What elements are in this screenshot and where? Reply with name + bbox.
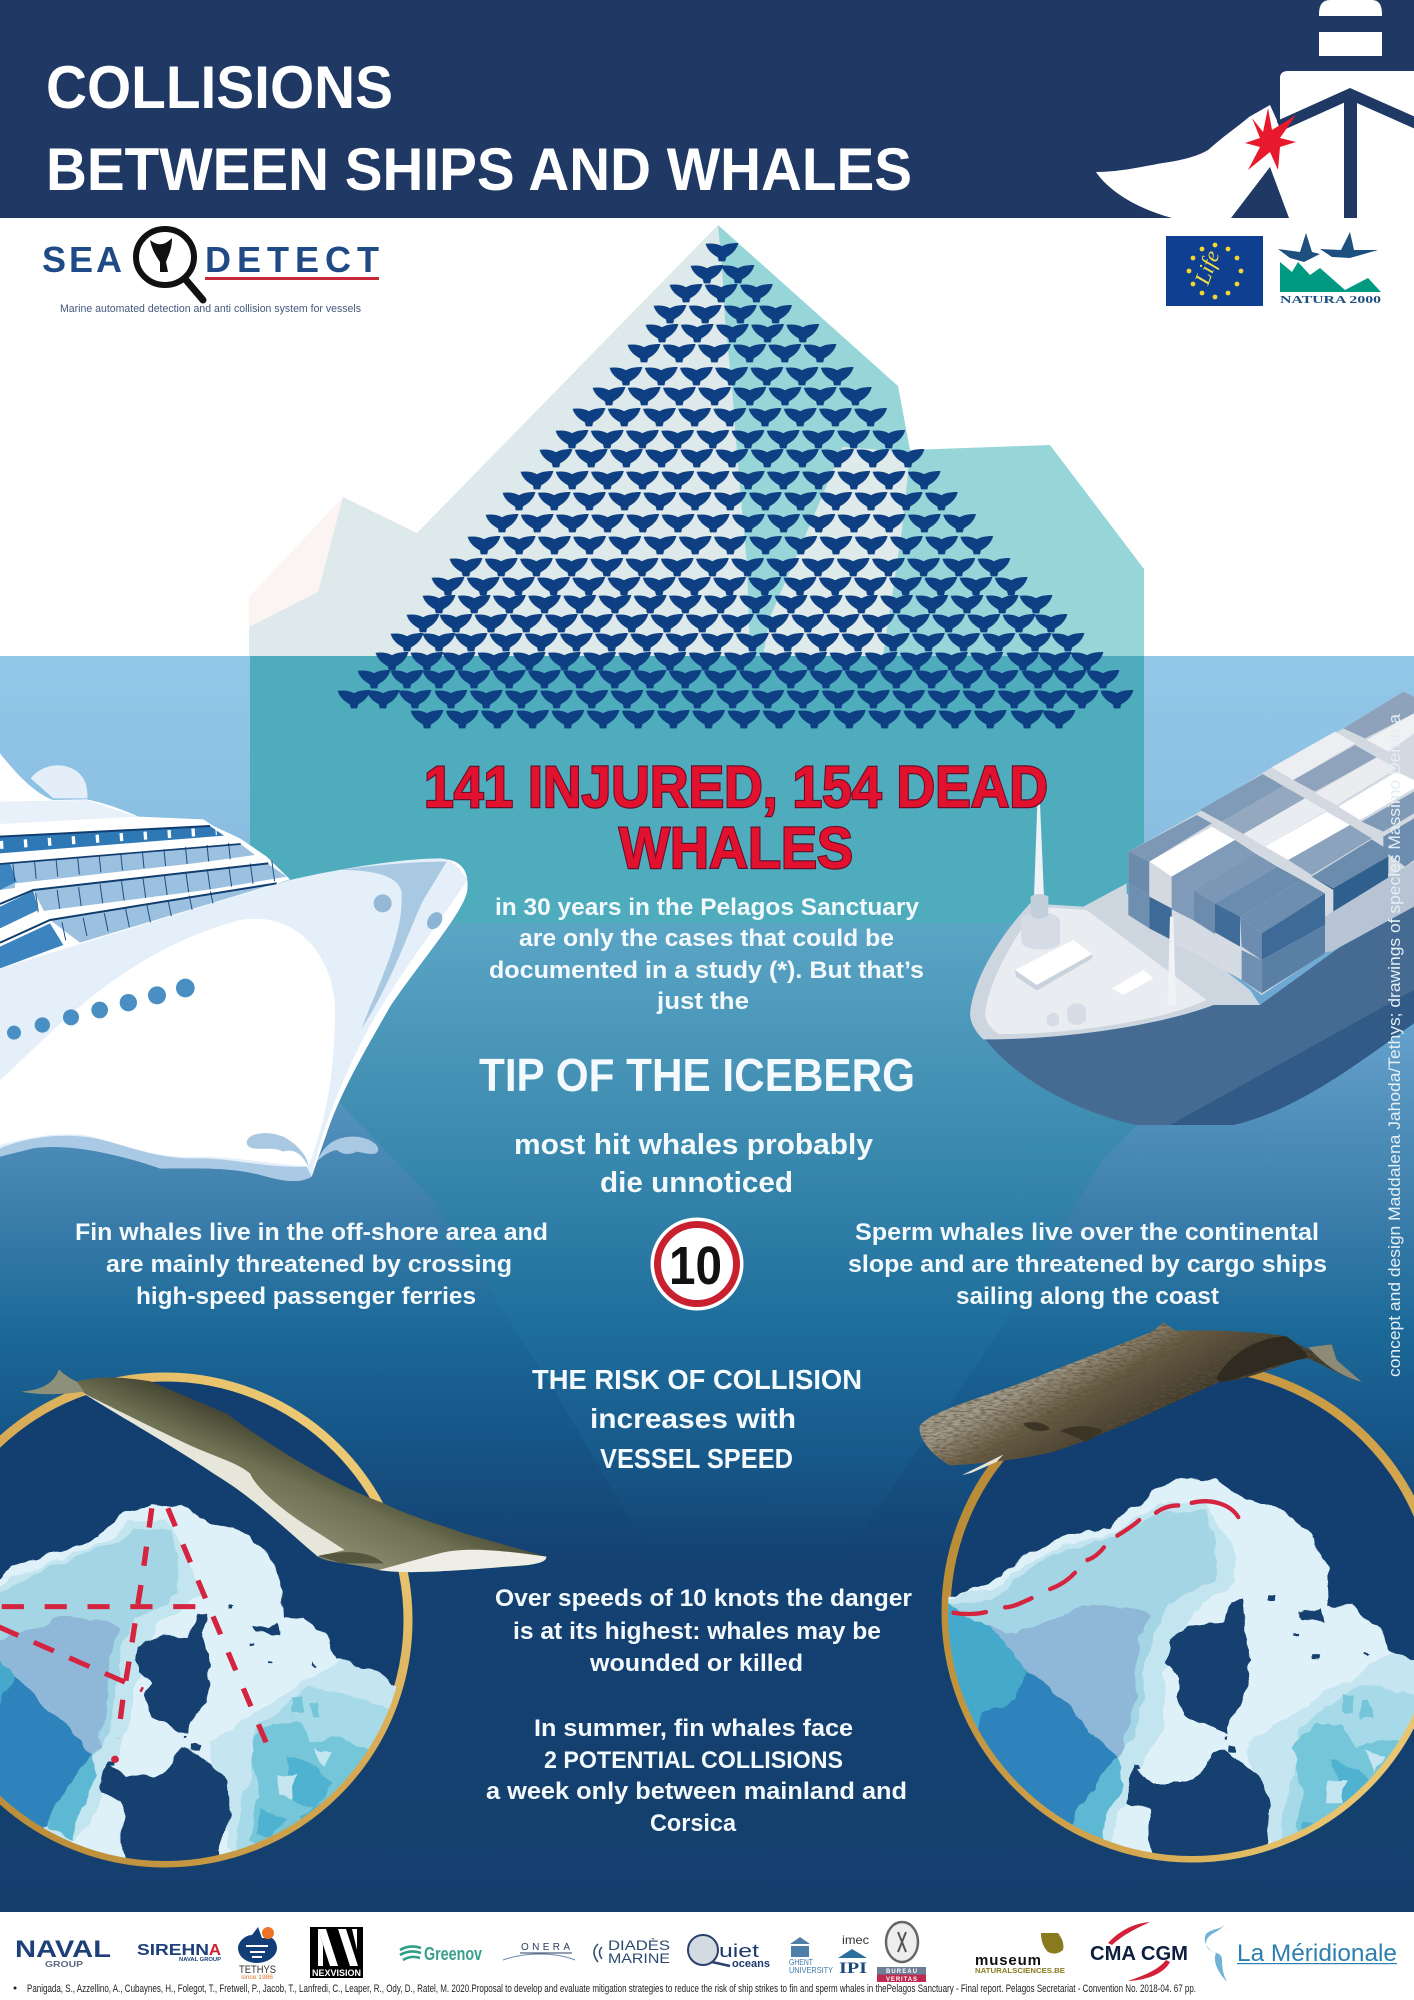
header band	[0, 0, 1414, 218]
text: sperm whales: sailing along the coast	[956, 1283, 1219, 1310]
logo: La Meridionale: La Méridionale	[1237, 1940, 1397, 1967]
text: documented cases	[489, 894, 924, 1015]
text: over 10 knots: wounded or killed	[589, 1650, 803, 1677]
title: BETWEEN SHIPS AND WHALES	[46, 136, 912, 203]
text: potential collisions: 2 POTENTIAL COLLISIONS	[544, 1747, 843, 1774]
logo: Sirehna: NAVAL GROUP	[179, 1957, 222, 1963]
logo: La Meridionale	[1205, 1923, 1397, 1982]
logo: Tethys: since 1986	[241, 1974, 273, 1981]
text: over 10 knots	[495, 1585, 912, 1677]
logo: Ghent University	[789, 1937, 833, 1975]
hull white highlight	[0, 919, 335, 1167]
logo: SEA DETECT: SEA	[42, 239, 122, 280]
logo: Greenov: Greenov	[424, 1944, 482, 1964]
text: fin whales	[75, 1219, 548, 1310]
sperm whale tail fluke	[1308, 1344, 1362, 1382]
logo: Naval Group: GROUP	[45, 1959, 83, 1969]
heading: tip of the iceberg: TIP OF THE ICEBERG	[479, 1049, 915, 1101]
icon: 10 knots speed limit sign	[650, 1218, 744, 1310]
sperm whale illustration	[920, 1323, 1362, 1475]
text: risk of collision: increases with	[590, 1403, 796, 1434]
left circle: fin whale shipping routes map	[0, 1372, 412, 1868]
logo: Sirehna: SIREHN	[137, 1942, 209, 1959]
cargo platform backing	[1128, 692, 1414, 995]
hull	[0, 858, 467, 1181]
bow white stripe	[312, 859, 468, 1177]
title	[46, 54, 912, 203]
text: risk of collision: THE RISK OF COLLISION	[532, 1364, 862, 1395]
headline: casualties: WHALES	[619, 816, 853, 881]
logo: Nexvision	[310, 1927, 363, 1978]
logo: CMA CGM	[1090, 1922, 1188, 1981]
text: documented cases: in 30 years in the Pelagos Sanctuary	[495, 894, 920, 921]
logo: EU Life	[1166, 236, 1263, 306]
deck fittings	[1015, 940, 1092, 985]
logo: Diades Marine: DIADÈS	[608, 1937, 670, 1953]
right circle: sperm whale shipping route map	[942, 1372, 1414, 1862]
logo: Sirehna: A	[209, 1942, 221, 1959]
iceberg waterline block	[250, 656, 1144, 923]
text: potential collisions: In summer, fin whales face	[534, 1715, 853, 1742]
headline: casualties: 141 INJURED, 154 DEAD	[424, 755, 1048, 820]
fin whale flipper	[318, 1552, 384, 1563]
logo: Naval Group	[15, 1936, 111, 1969]
ship funnel dome	[31, 765, 87, 798]
logo: SEA DETECT: DETECT	[205, 239, 379, 280]
text: documented cases: documented in a study (*). But that’s	[489, 957, 924, 984]
text: sperm whales	[848, 1219, 1327, 1310]
bow facet	[340, 862, 447, 1028]
headline: casualties	[424, 755, 1048, 881]
credits vertical text: concept and design Maddalena Jahoda/Tethys; drawings of species Massimo Demma	[1385, 713, 1404, 1377]
text: risk of collision	[532, 1364, 862, 1474]
containers	[1128, 815, 1212, 862]
text: fin whales: Fin whales live in the off-shore area and	[75, 1219, 548, 1246]
text: die unnoticed: die unnoticed	[600, 1167, 793, 1199]
logo: Museum of Natural Sciences	[975, 1933, 1065, 1975]
text: potential collisions: Corsica	[650, 1810, 737, 1837]
logo: Natura 2000: NATURA 2000	[1280, 294, 1382, 306]
logo: Diades Marine: MARINE	[608, 1950, 670, 1966]
logo: CMA CGM: CMA CGM	[1090, 1943, 1188, 1965]
iceberg above water	[249, 225, 1144, 923]
logo: imec IPI: imec	[842, 1933, 869, 1947]
cruise ship	[0, 753, 468, 1181]
icon: 10 knots speed limit sign: 10	[669, 1236, 722, 1296]
text: documented cases: are only the cases that could be	[519, 925, 894, 952]
logo: Museum of Natural Sciences: NATURALSCIENCES.BE	[975, 1966, 1065, 1975]
logo: Ghent University: GHENT	[789, 1957, 813, 1967]
portholes	[374, 894, 392, 912]
fin whale belly	[82, 1393, 345, 1557]
icon: ship prow striking a whale	[1096, 0, 1414, 218]
text: documented cases: just the	[656, 988, 749, 1015]
map: ferry routes	[0, 1504, 396, 1861]
logo: Ghent University: UNIVERSITY	[789, 1965, 833, 1975]
text: potential collisions	[486, 1715, 907, 1837]
fin whale fluke	[21, 1369, 84, 1394]
logo: ONERA: ONERA	[521, 1942, 570, 1953]
text: over 10 knots: Over speeds of 10 knots the danger	[495, 1585, 912, 1612]
bow waves	[247, 1133, 308, 1167]
container ship	[970, 692, 1414, 1125]
logo: Sirehna	[137, 1942, 222, 1963]
hull waterline shade	[0, 1136, 312, 1181]
logo: Museum of Natural Sciences: museum	[975, 1952, 1041, 1969]
text: die unnoticed: most hit whales probably	[514, 1129, 873, 1161]
logo: imec IPI: IPI	[839, 1960, 867, 1977]
fin whale jaw	[379, 1550, 546, 1572]
whale tails grid: one tail per documented case	[336, 243, 1135, 730]
text: over 10 knots: is at its highest: whales may be	[513, 1618, 881, 1645]
logo: EU Life: Life	[1189, 247, 1224, 289]
fin whale illustration	[21, 1369, 546, 1572]
text: sperm whales: Sperm whales live over the continental	[855, 1219, 1319, 1246]
logo: Bureau Veritas: BUREAU	[886, 1969, 917, 1975]
text: potential collisions: a week only between mainland and	[486, 1778, 907, 1805]
logo: Naval Group: NAVAL	[15, 1936, 111, 1963]
deck	[970, 883, 1260, 1039]
logo: ONERA	[503, 1942, 575, 1960]
footer band	[0, 1912, 1414, 2000]
title: COLLISIONS	[46, 54, 393, 121]
text: risk of collision: VESSEL SPEED	[600, 1443, 793, 1474]
text: die unnoticed	[514, 1129, 873, 1199]
logo: Bureau Veritas: VERITAS	[886, 1977, 917, 1983]
text: sperm whales: slope and are threatened by cargo ships	[848, 1251, 1327, 1278]
logo: Quiet Oceans	[688, 1935, 770, 1970]
text: fin whales: high-speed passenger ferries	[136, 1283, 476, 1310]
logo: Quiet Oceans: oceans	[732, 1958, 770, 1970]
logo: Greenov	[400, 1944, 482, 1964]
sperm whale jaw	[962, 1455, 1003, 1475]
logo: SEA DETECT: Marine automated detection and anti collision system for vessels	[60, 303, 361, 315]
logo: SEA DETECT	[42, 229, 379, 315]
sea gradient	[0, 656, 1414, 1912]
logo: Diades Marine	[594, 1937, 670, 1966]
logo: Bureau Veritas	[877, 1922, 926, 1983]
logo: Natura 2000	[1278, 232, 1382, 306]
mast	[1034, 803, 1044, 897]
logo: Tethys: TETHYS	[239, 1964, 276, 1976]
logo: Nexvision: NEXVISION	[312, 1968, 361, 1978]
sperm whale dark back	[1217, 1336, 1307, 1382]
logo: imec IPI	[838, 1933, 869, 1977]
map: coastal cargo route	[948, 1478, 1414, 1856]
text: fin whales: are mainly threatened by crossing	[106, 1251, 512, 1278]
submerged iceberg shape	[250, 923, 1144, 1640]
logo: Tethys	[238, 1927, 277, 1981]
logo: Quiet Oceans: uiet	[719, 1941, 759, 1961]
